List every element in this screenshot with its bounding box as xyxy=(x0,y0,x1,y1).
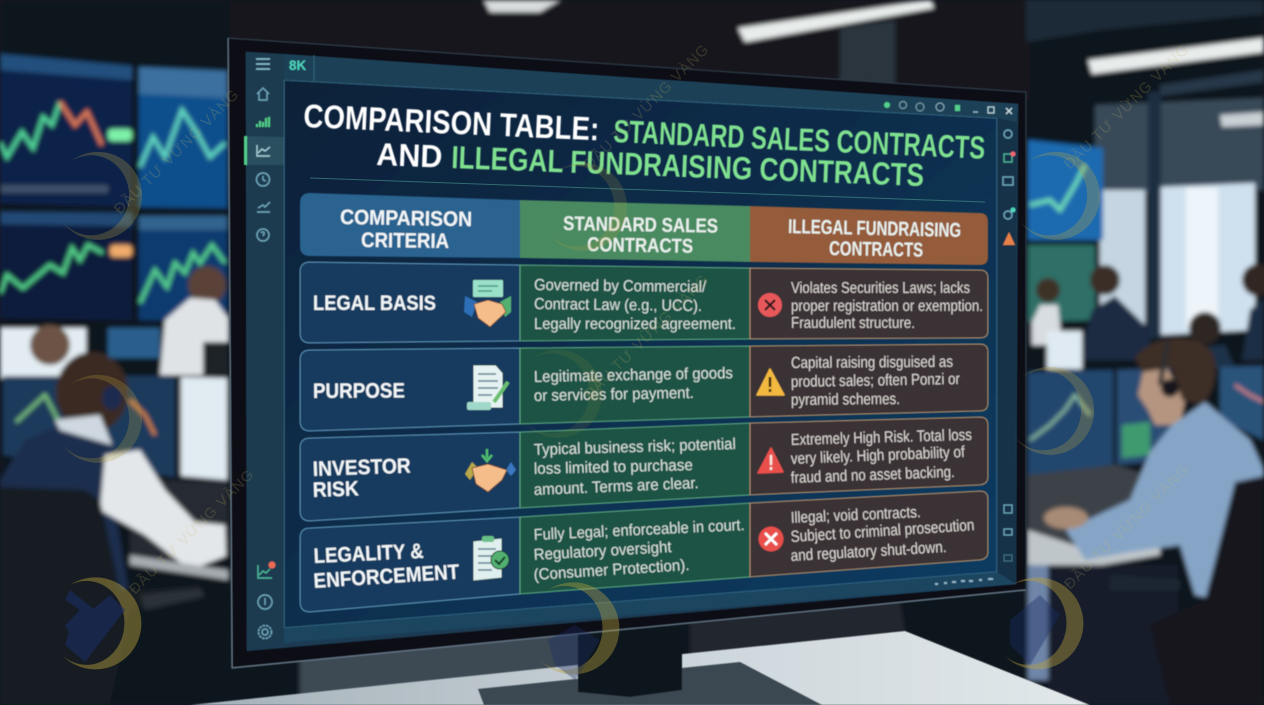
standard cell: investor risk: loss limited to purchase xyxy=(534,457,693,478)
title: STANDARD SALES CONTRACTS xyxy=(613,113,986,166)
icon: red notification dot xyxy=(268,562,276,568)
left background people and screens xyxy=(0,266,228,378)
title divider xyxy=(310,178,985,202)
icon: document and pen xyxy=(467,365,508,410)
standard cell: investor risk: amount. Terms are clear. xyxy=(533,475,699,499)
8K label: 8K xyxy=(289,58,307,73)
standard cell: legality and enforcement: Fully Legal; enforceable in court. xyxy=(533,517,745,544)
watermark text: ĐẦU TƯ VỪNG VÀNG xyxy=(126,466,258,598)
icon: help xyxy=(257,229,269,241)
watermark logos xyxy=(62,152,1100,674)
illegal cell: legal basis: Violates Securities Laws; lacks xyxy=(791,280,970,297)
watermark text: ĐẦU TƯ VỪNG VÀNG xyxy=(1061,41,1193,173)
criterion cell: legal basis xyxy=(300,262,520,343)
icon: handshake and arrow xyxy=(465,449,516,492)
standard cell: purpose: Legitimate exchange of goods xyxy=(534,365,733,386)
icon: handshake and document xyxy=(464,280,511,327)
criterion cell: purpose: PURPOSE xyxy=(313,380,405,403)
header: standard sales contracts: CONTRACTS xyxy=(587,234,693,258)
standard cell: legal basis: Governed by Commercial/ xyxy=(534,277,707,296)
title: COMPARISON TABLE: xyxy=(303,97,600,147)
header: comparison criteria: CRITERIA xyxy=(361,229,449,253)
header: comparison criteria xyxy=(300,193,520,258)
icon: red circle with white cross xyxy=(758,526,784,552)
standard cell: investor risk: Typical business risk; potential xyxy=(534,436,736,459)
standard cell: legality and enforcement: (Consumer Protection). xyxy=(533,557,690,584)
header: illegal fundraising contracts xyxy=(750,206,988,265)
right sidebar xyxy=(997,118,1017,584)
watermark text: ĐẦU TƯ VỪNG VÀNG xyxy=(111,86,243,218)
header: illegal fundraising contracts: ILLEGAL FUNDRAISING xyxy=(788,216,961,242)
standard cell: legality and enforcement xyxy=(520,503,750,594)
criterion cell: investor risk: RISK xyxy=(312,477,359,502)
title: AND xyxy=(376,136,443,175)
standard cell: purpose: or services for payment. xyxy=(534,385,694,405)
illegal cell: purpose: pyramid schemes. xyxy=(791,391,900,409)
row: legal basis xyxy=(300,262,988,343)
standard cell: legal basis xyxy=(520,265,750,341)
window control icons xyxy=(884,102,1012,114)
left trader xyxy=(0,352,228,705)
watermark text: ĐẦU TƯ VỪNG VÀNG xyxy=(581,41,713,173)
standard cell: purpose xyxy=(520,346,750,424)
gap behind monitor xyxy=(300,620,620,705)
header: standard sales contracts xyxy=(520,200,750,262)
watermark text: ĐẦU TƯ VỪNG VÀNG xyxy=(1061,461,1193,593)
header: standard sales contracts: STANDARD SALES xyxy=(563,213,718,238)
standard cell: investor risk xyxy=(520,423,750,508)
illegal cell: legality and enforcement: and regulatory shut-down. xyxy=(790,539,947,565)
ceiling lights xyxy=(484,0,1264,127)
icon: clipboard with check xyxy=(473,536,509,581)
illegal cell: investor risk xyxy=(750,417,988,495)
icon: red warning triangle xyxy=(758,448,783,473)
left sidebar xyxy=(244,52,284,651)
illegal cell: investor risk: very likely. High probability of xyxy=(790,444,965,468)
monitor bezel xyxy=(228,38,1026,668)
icon: settings xyxy=(258,626,272,638)
icon: info xyxy=(258,595,272,609)
row: purpose xyxy=(300,344,988,431)
illegal cell: legality and enforcement: Illegal; void contracts. xyxy=(790,504,921,527)
icon: yellow warning triangle xyxy=(757,369,784,395)
watermark brand marks xyxy=(65,590,1060,680)
standard cell: legal basis: Contract Law (e.g., UCC). xyxy=(534,296,702,315)
title: ILLEGAL FUNDRAISING CONTRACTS xyxy=(451,139,925,193)
icon: bars xyxy=(257,117,269,127)
criterion cell: legality and enforcement: ENFORCEMENT xyxy=(313,561,460,593)
criterion cell: legal basis: LEGAL BASIS xyxy=(313,292,436,315)
illegal cell: legal basis xyxy=(750,268,988,339)
criterion cell: investor risk xyxy=(300,432,520,521)
left trading monitors xyxy=(0,54,227,320)
illegal cell: purpose: Capital raising disguised as xyxy=(791,354,953,372)
illegal cell: legal basis: Fraudulent structure. xyxy=(791,315,915,332)
criterion cell: investor risk: INVESTOR xyxy=(312,455,411,481)
illegal cell: investor risk: fraud and no asset backing. xyxy=(791,464,955,487)
right background screens and people xyxy=(1028,140,1264,369)
watermark text xyxy=(111,41,1193,598)
icon: menu xyxy=(256,59,270,69)
comparison table xyxy=(300,193,988,612)
monitor stand and base xyxy=(478,618,822,705)
top bar xyxy=(284,54,1018,125)
illegal cell: purpose: product sales; often Ponzi or xyxy=(791,371,961,391)
icon: alert chart xyxy=(258,565,272,578)
app window panel xyxy=(244,52,1018,651)
criterion cell: legality and enforcement xyxy=(300,517,520,612)
criterion cell: purpose xyxy=(300,348,520,431)
watermark text: ĐẦU TƯ VỪNG VÀNG xyxy=(581,271,713,403)
illegal cell: investor risk: Extremely High Risk. Total loss xyxy=(791,427,972,449)
right trader and desk xyxy=(1028,338,1264,705)
standard cell: legality and enforcement: Regulatory oversight xyxy=(533,539,673,564)
illegal cell: purpose xyxy=(750,344,988,417)
icon: red cross circle xyxy=(758,293,782,317)
illegal cell: legal basis: proper registration or exemption. xyxy=(791,298,983,315)
row: investor risk xyxy=(300,417,988,521)
icon: trend xyxy=(257,202,270,212)
icon: clock xyxy=(257,173,270,186)
front desk xyxy=(190,631,1090,705)
icon: line chart xyxy=(257,145,270,156)
row: legality and enforcement xyxy=(300,491,988,612)
icon: home xyxy=(257,88,269,100)
title xyxy=(303,97,986,193)
illegal cell: legality and enforcement xyxy=(750,491,988,577)
criterion cell: legality and enforcement: LEGALITY & xyxy=(313,540,424,568)
header: illegal fundraising contracts: CONTRACTS xyxy=(829,238,923,262)
header: comparison criteria: COMPARISON xyxy=(340,206,472,231)
standard cell: legal basis: Legally recognized agreement. xyxy=(534,316,736,333)
illegal cell: legality and enforcement: Subject to criminal prosecution xyxy=(790,517,975,546)
bottom status bar xyxy=(284,572,1016,643)
